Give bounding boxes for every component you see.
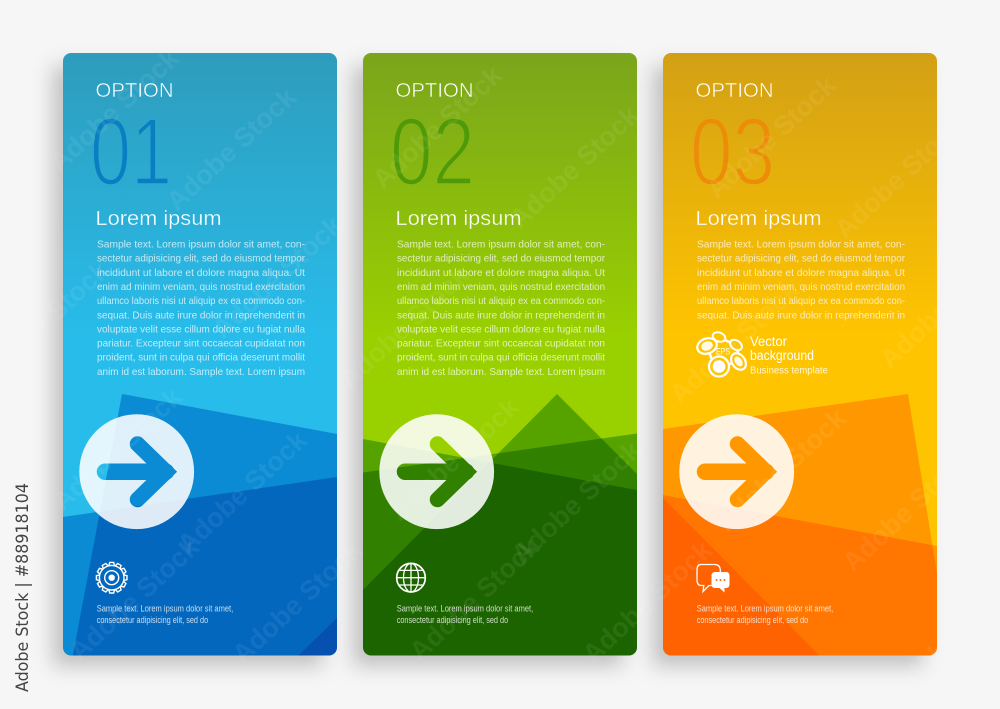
body text: anim id est laborum. Sample text. Lorem ipsum <box>97 367 305 378</box>
stock watermarks: Adobe Stock <box>44 42 185 177</box>
body text: pariatur. Excepteur sint occaecat cupidatat non <box>397 339 605 350</box>
stock watermarks: Adobe Stock <box>829 109 970 244</box>
body text: voluptate velit esse cillum dolore eu fugiat nulla <box>97 324 305 335</box>
body text: ullamco laboris nisi ut aliquip ex ea commodo con- <box>697 296 905 307</box>
body text: incididunt ut labore et dolore magna aliqua. Ut <box>697 268 905 279</box>
icon: EPS molecule: EPS <box>716 346 730 356</box>
body text <box>697 240 906 321</box>
logo: EPS vector background: background <box>750 348 814 363</box>
footer text: consectetur adipisicing elit, sed do <box>397 615 508 625</box>
big number 01: 01 <box>90 98 172 206</box>
stock watermarks: Adobe Stock <box>701 69 842 204</box>
option label: OPTION <box>396 80 474 102</box>
body text <box>97 240 306 378</box>
body text: voluptate velit esse cillum dolore eu fugiat nulla <box>397 324 605 335</box>
stock watermarks: Adobe Stock <box>577 534 718 669</box>
body text: ullamco laboris nisi ut aliquip ex ea commodo con- <box>397 296 605 307</box>
stock watermarks: Adobe Stock <box>367 59 508 194</box>
heading: Lorem ipsum <box>396 208 522 230</box>
footer text <box>97 604 233 625</box>
body text: Sample text. Lorem ipsum dolor sit amet, con- <box>697 240 905 250</box>
green background shapes <box>363 53 640 660</box>
body text: proident, sunt in culpa qui officia deserunt mollit <box>97 353 305 364</box>
big number 03: 03 <box>690 98 775 206</box>
body text: sectetur adipisicing elit, sed do eiusmod tempor <box>397 254 606 265</box>
body text: proident, sunt in culpa qui officia deserunt mollit <box>397 353 605 364</box>
stock watermarks: Adobe Stock <box>47 381 188 516</box>
orange background shapes <box>663 53 951 660</box>
body text: sequat. Duis aute irure dolor in reprehenderit in <box>397 310 605 321</box>
stock watermarks: Adobe Stock <box>504 99 645 234</box>
footer text: Sample text. Lorem ipsum dolor sit amet, <box>97 604 233 614</box>
body text: sequat. Duis aute irure dolor in reprehenderit in <box>697 310 905 321</box>
arrow button <box>79 414 194 529</box>
arrow button <box>679 414 794 529</box>
blue background shapes <box>63 53 337 660</box>
stock watermarks: Adobe Stock <box>837 442 978 577</box>
footer text: consectetur adipisicing elit, sed do <box>97 615 208 625</box>
footer text <box>697 604 833 625</box>
stock watermarks: Adobe Stock <box>161 81 302 216</box>
panel: option 03 <box>663 53 951 660</box>
body text: incididunt ut labore et dolore magna aliqua. Ut <box>397 268 605 279</box>
logo: EPS vector background <box>695 331 828 376</box>
stock watermarks: Adobe Stock <box>711 402 852 537</box>
stock watermarks: Adobe Stock <box>64 531 205 666</box>
body text: sectetur adipisicing elit, sed do eiusmod tempor <box>97 254 306 265</box>
stock id label: Adobe Stock | #88918104 <box>13 483 33 692</box>
heading: Lorem ipsum <box>696 208 822 230</box>
body text: ullamco laboris nisi ut aliquip ex ea commodo con- <box>97 296 305 307</box>
stock watermarks: Adobe Stock <box>506 434 647 569</box>
body text: enim ad minim veniam, quis nostrud exercitation <box>397 282 605 293</box>
footer text <box>397 604 533 625</box>
stock watermarks: Adobe Stock <box>664 274 805 409</box>
panel: option 01 <box>63 53 337 660</box>
icon: gear <box>96 562 127 593</box>
arrow button <box>379 414 494 529</box>
body text: pariatur. Excepteur sint occaecat cupidatat non <box>97 339 305 350</box>
footer text: Sample text. Lorem ipsum dolor sit amet, <box>697 604 833 614</box>
body text <box>397 240 606 378</box>
body text: Sample text. Lorem ipsum dolor sit amet, con- <box>97 240 305 250</box>
footer text: Sample text. Lorem ipsum dolor sit amet, <box>397 604 533 614</box>
heading: Lorem ipsum <box>96 208 222 230</box>
option label: OPTION <box>96 80 174 102</box>
card shadows <box>53 66 923 666</box>
big number 02: 02 <box>390 98 475 206</box>
body text: Sample text. Lorem ipsum dolor sit amet, con- <box>397 240 605 250</box>
stock watermarks: Adobe Stock <box>227 534 368 669</box>
body text: anim id est laborum. Sample text. Lorem ipsum <box>397 367 605 378</box>
body text: sectetur adipisicing elit, sed do eiusmod tempor <box>697 254 906 265</box>
body text: sequat. Duis aute irure dolor in reprehenderit in <box>97 310 305 321</box>
stock watermarks: Adobe Stock <box>207 209 348 344</box>
logo text: Vector <box>750 334 787 349</box>
body text: enim ad minim veniam, quis nostrud exercitation <box>97 282 305 293</box>
stock watermarks: Adobe Stock <box>334 259 475 394</box>
footer text: consectetur adipisicing elit, sed do <box>697 615 808 625</box>
stock watermarks: Adobe Stock <box>384 391 525 526</box>
stock watermarks: Adobe Stock <box>404 531 545 666</box>
body text: enim ad minim veniam, quis nostrud exercitation <box>697 282 905 293</box>
icon: globe <box>397 563 425 592</box>
option label: OPTION <box>696 80 774 102</box>
stock watermarks: Adobe Stock <box>172 424 313 559</box>
icon: speech bubbles <box>697 564 730 592</box>
body text: incididunt ut labore et dolore magna aliqua. Ut <box>97 268 305 279</box>
panel: option 02 <box>363 53 640 660</box>
logo: EPS vector background: Business template <box>750 366 828 376</box>
